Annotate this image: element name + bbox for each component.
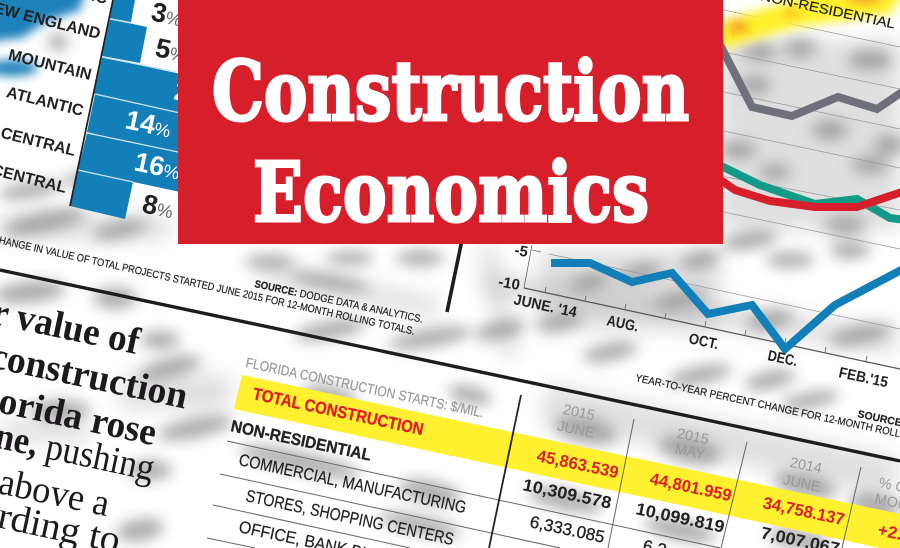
axis labels: -10 bbox=[497, 273, 521, 294]
bar values: 14% bbox=[123, 105, 174, 143]
green line bbox=[715, 163, 900, 220]
title bbox=[212, 44, 689, 241]
bar values: 5% bbox=[153, 33, 189, 68]
axis labels: OCT. bbox=[687, 330, 720, 353]
column headers: 2015 bbox=[675, 426, 710, 448]
axis labels: DEC. bbox=[766, 347, 799, 370]
column headers: JUNE bbox=[782, 472, 822, 496]
column headers: JUNE bbox=[556, 418, 596, 442]
table values: 10,099.819 bbox=[634, 499, 726, 537]
yellow highlight band bbox=[718, 0, 900, 50]
red line bbox=[715, 176, 900, 207]
table values: 44,801.959 bbox=[648, 469, 733, 505]
region labels: CENTRAL bbox=[0, 125, 77, 160]
article text: orida rose bbox=[0, 380, 160, 454]
axis line bbox=[70, 0, 113, 206]
gray line bbox=[715, 35, 900, 116]
bar chart caption and source: SOURCE: DODGE DATA & ANALYTICS. bbox=[253, 278, 424, 326]
region labels: MOUNTAIN bbox=[7, 47, 93, 84]
region labels: ATLANTIC bbox=[5, 84, 86, 120]
row labels: COMMERCIAL, MANUFACTURING bbox=[237, 450, 468, 517]
bar chart: regional share bbox=[0, 0, 193, 224]
region labels bbox=[0, 0, 110, 197]
bar chart caption and source: CHANGE IN VALUE OF TOTAL PROJECTS STARTED JUNE 2015 FOR 12-MONTH ROLLING TOTALS. bbox=[0, 233, 416, 338]
column headers: 2014 bbox=[788, 455, 823, 477]
table values: 10,309.578 bbox=[521, 475, 613, 513]
blurred blue map fragment bbox=[0, 0, 88, 76]
table title: FLORIDA CONSTRUCTION STARTS: $/MIL. bbox=[244, 354, 485, 420]
table values: 34,758.137 bbox=[761, 493, 846, 529]
axis labels bbox=[497, 242, 890, 391]
blue line bbox=[551, 263, 900, 349]
title: Economics bbox=[253, 145, 649, 241]
bar values: 2 bbox=[172, 76, 193, 108]
column headers bbox=[556, 402, 900, 518]
table values bbox=[521, 446, 900, 548]
column headers: 2015 bbox=[561, 402, 596, 424]
chart grid bbox=[524, 5, 900, 369]
table: Florida construction starts bbox=[207, 354, 900, 548]
title: Construction bbox=[212, 44, 689, 140]
axis labels: JUNE. '14 bbox=[512, 291, 579, 321]
bar values: 16% bbox=[132, 147, 183, 185]
bar values bbox=[123, 0, 193, 224]
yellow total row bbox=[234, 375, 900, 548]
article text bbox=[0, 291, 191, 548]
column headers: MAY bbox=[673, 441, 707, 463]
bar values: 8% bbox=[140, 189, 176, 224]
table values: 45,863.539 bbox=[535, 446, 620, 482]
row labels: TOTAL CONSTRUCTION bbox=[251, 384, 425, 439]
axis labels: AUG. bbox=[605, 312, 640, 336]
table values: 6,333.085 bbox=[528, 512, 606, 547]
line chart: construction starts bbox=[497, 0, 900, 391]
row labels bbox=[229, 384, 468, 548]
column lines bbox=[608, 419, 861, 548]
row lines bbox=[207, 441, 720, 548]
row labels: NON-RESIDENTIAL bbox=[229, 417, 373, 465]
axis labels: -5 bbox=[513, 242, 529, 261]
axis labels: FEB.'15 bbox=[837, 364, 890, 391]
title panel bbox=[178, 0, 723, 244]
